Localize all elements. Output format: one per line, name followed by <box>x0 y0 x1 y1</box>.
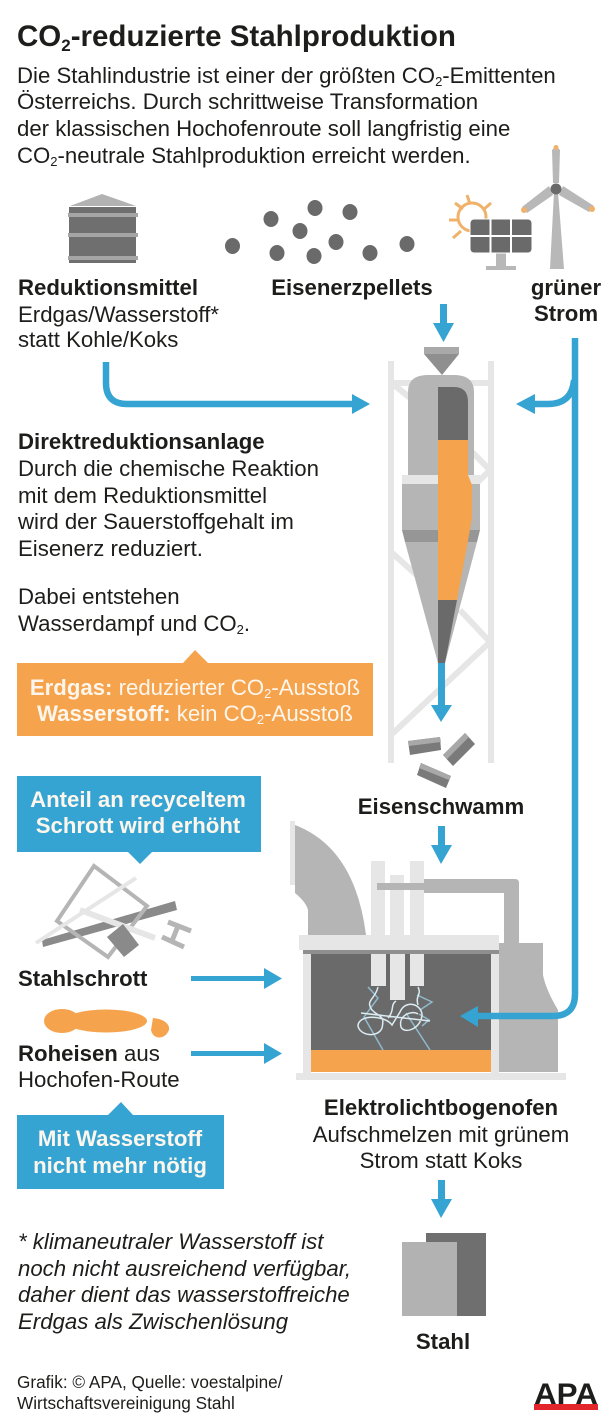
footnote: * klimaneutraler Wasserstoff ist <box>18 1229 324 1254</box>
intro text: CO <box>17 143 50 168</box>
label: Roheisen: Roheisen aus <box>18 1041 160 1066</box>
title: -reduzierte Stahlproduktion <box>71 20 456 53</box>
footnote: noch nicht ausreichend verfügbar, <box>18 1256 351 1281</box>
label: Roheisen: Hochofen-Route <box>18 1067 180 1092</box>
callout: recycled scrap <box>17 776 261 864</box>
label: Reduktionsmittel <box>18 275 219 352</box>
footnote: Erdgas als Zwischenlösung <box>18 1309 289 1334</box>
label: Reduktionsmittel: Reduktionsmittel <box>18 275 198 300</box>
icon: steel <box>402 1233 486 1316</box>
icon: pig iron <box>44 1009 169 1038</box>
label: Direktreduktionsanlage: 2 <box>237 622 244 637</box>
label: Direktreduktionsanlage: Direktreduktionsanlage <box>18 429 265 454</box>
arrow: pig iron to furnace <box>191 1043 282 1064</box>
label: Elektrolichtbogenofen: Elektrolichtbogenofen <box>324 1095 558 1120</box>
label: Elektrolichtbogenofen <box>313 1095 569 1173</box>
arcs and scrap in furnace <box>358 987 432 1050</box>
scaffold <box>391 361 491 763</box>
icon: sun <box>449 195 491 238</box>
label: Reduktionsmittel: Erdgas/Wasserstoff* <box>18 302 219 327</box>
callout: recycled scrap: Anteil an recyceltem <box>30 787 246 812</box>
arrow: sponge iron to furnace <box>431 826 452 864</box>
icon: wind turbine <box>521 145 595 269</box>
intro text: der klassischen Hochofenroute soll langfristig eine <box>17 116 510 141</box>
label: Direktreduktionsanlage: wird der Sauerstoffgehalt im <box>17 509 294 534</box>
footnote <box>18 1229 351 1334</box>
arrow: reducing agent to plant <box>106 362 370 414</box>
label: Direktreduktionsanlage: Durch die chemische Reaktion <box>18 456 319 481</box>
icon: sponge iron pieces <box>408 733 475 788</box>
logo: APA: APA <box>534 1378 598 1411</box>
callout: hydrogen vs natural gas: 2 <box>264 686 271 701</box>
intro text: -neutrale Stahlproduktion erreicht werden. <box>58 143 471 168</box>
callout: hydrogen <box>17 1102 224 1189</box>
label: Eisenerzpellets: Eisenerzpellets <box>271 275 433 300</box>
label: grüner Strom: Strom <box>534 301 598 326</box>
callout: recycled scrap: Schrott wird erhöht <box>36 813 241 838</box>
arrow: green power branch to plant <box>516 380 574 414</box>
label: Direktreduktionsanlage: Eisenerz reduziert. <box>18 536 203 561</box>
electric arc furnace <box>290 821 566 1080</box>
icon: iron ore pellets <box>225 200 414 264</box>
label: Elektrolichtbogenofen: Aufschmelzen mit grünem <box>313 1122 569 1147</box>
callout: hydrogen vs natural gas <box>17 650 373 736</box>
label: grüner Strom <box>531 275 601 326</box>
callout: hydrogen vs natural gas: -Ausstoß <box>271 675 360 700</box>
footnote: daher dient das wasserstoffreiche <box>18 1282 350 1307</box>
intro text: 2 <box>50 154 58 169</box>
label: Elektrolichtbogenofen: Strom statt Koks <box>360 1148 522 1173</box>
icon: steel scrap <box>36 866 191 957</box>
callout: hydrogen vs natural gas: Wasserstoff: kein CO <box>37 701 257 726</box>
icon: solar panel <box>470 219 532 270</box>
arrow: furnace to steel <box>431 1180 452 1218</box>
source: Grafik: © APA, Quelle: voestalpine/ <box>17 1372 283 1392</box>
label: Direktreduktionsanlage <box>17 429 319 637</box>
arrow: scrap to furnace <box>191 968 282 989</box>
label: Roheisen <box>18 1041 180 1092</box>
label: Stahlschrott: Stahlschrott <box>18 966 148 991</box>
arrow: pellets to plant <box>433 304 454 342</box>
label: Reduktionsmittel: statt Kohle/Koks <box>18 327 178 352</box>
direct reduction plant <box>402 347 480 663</box>
source <box>17 1372 283 1413</box>
label: Direktreduktionsanlage: Dabei entstehen <box>18 584 180 609</box>
label: Eisenschwamm: Eisenschwamm <box>358 794 524 819</box>
intro text: -Emittenten <box>442 63 556 88</box>
arrow: green power to furnace <box>460 338 575 1027</box>
label: Direktreduktionsanlage: mit dem Reduktionsmittel <box>18 483 267 508</box>
callout: hydrogen: nicht mehr nötig <box>33 1153 207 1178</box>
callout: hydrogen vs natural gas: Erdgas: reduzierter CO <box>30 675 264 700</box>
intro text: Die Stahlindustrie ist einer der größten CO <box>17 63 435 88</box>
label: Direktreduktionsanlage: . <box>244 611 250 636</box>
arrow: plant to sponge iron <box>431 663 452 722</box>
label: grüner Strom: grüner <box>531 275 601 300</box>
label: Stahl: Stahl <box>416 1329 470 1354</box>
intro text: 2 <box>435 74 442 89</box>
intro text <box>17 63 556 169</box>
source: Wirtschaftsvereinigung Stahl <box>17 1393 235 1413</box>
callout: hydrogen vs natural gas: -Ausstoß <box>264 701 353 726</box>
callout: hydrogen vs natural gas: 2 <box>257 712 264 727</box>
callout: hydrogen: Mit Wasserstoff <box>38 1126 203 1151</box>
intro text: Österreichs. Durch schrittweise Transformation <box>17 89 478 114</box>
icon: tank <box>68 194 138 263</box>
label: Direktreduktionsanlage: Wasserdampf und CO <box>18 611 237 636</box>
title: CO <box>17 20 61 53</box>
title: 2 <box>61 36 71 55</box>
